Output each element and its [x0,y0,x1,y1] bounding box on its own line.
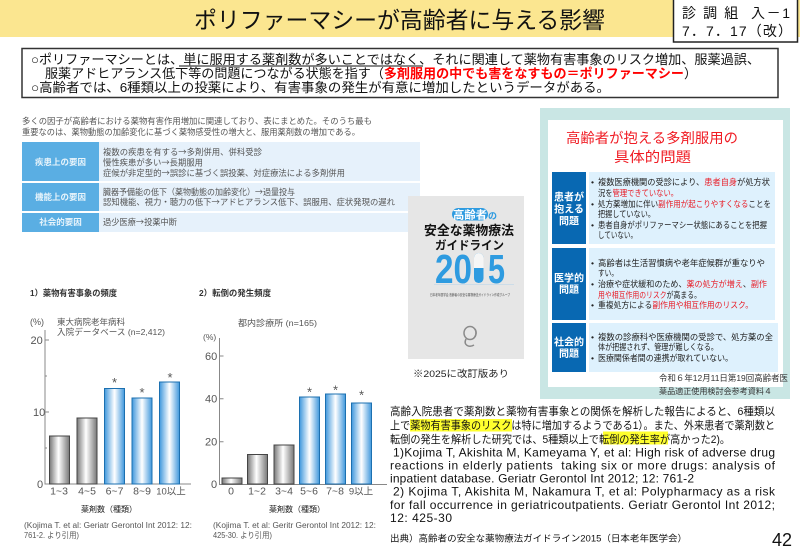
significance marks: * [307,384,312,400]
book cover: 日本老年医学会 高齢者の安全な薬物療法ガイドライン作成グループ [430,292,510,297]
x axis labels [228,486,374,514]
chart 2 heading: 2）転倒の発生頻度 [199,288,272,298]
notice box: document ID: 診 調 組 入－1 [682,5,790,21]
panel: specific problems [540,108,790,399]
row: disease factors: 疾患上の要因 [35,157,86,167]
book cover: の [488,211,497,221]
row: patient problems: 抱える [554,202,584,216]
row: disease factors: 慢性疾患が多い→長期服用 [103,156,203,168]
chart 1: adverse drug events [24,288,192,540]
x axis labels: 1~3 [50,486,68,498]
row: patient problems: • [591,177,594,187]
significance marks: * [167,370,173,385]
book cover: 高齢者 [453,208,487,222]
chart 2 citation: (Kojima T. et al: Geritr Gerontol Int 2012: 12: [213,521,376,530]
row: functional factors: 臓器予備能の低下（薬物動態の加齢変化）→過量投与 [103,186,295,198]
row: patient problems: 把握していない。 [598,208,655,219]
x axis labels: 4~5 [78,486,96,498]
book year with capsule: 5 [488,246,505,292]
references: 12: 425-30 [390,511,452,525]
page number: 42 [772,530,792,550]
chart 1 heading: 1）薬物有害事象の頻度 [30,288,118,298]
y axis labels [205,351,217,491]
factor table [22,142,420,232]
title band [0,0,800,37]
row: medical problems [552,248,775,320]
explanatory text with highlights: 転倒の発生を解析した研究では、5種類以上で転倒の発生率が高かった2)。 [390,432,730,446]
row: patient problems: 問題 [559,216,579,228]
title: ポリファーマシーが高齢者に与える影響 [194,7,605,33]
x axis labels: 6~7 [106,486,124,498]
chart 1: adverse drug events: 761-2. より引用) [24,531,79,540]
row: social problems: 問題 [559,348,579,360]
x axis labels: 1~2 [248,486,266,498]
row: medical problems: 医学的 [554,272,584,284]
row: medical problems: 治療や症状緩和のため、薬の処方が増え、副作 [598,278,767,289]
chart 2: falls: (%) [203,332,216,342]
row: medical problems: 高齢者は生活習慣病や老年症候群が重なりや [598,257,765,268]
notice box: document ID [674,0,798,42]
book title: 安全な薬物療法 [424,223,514,238]
x axis labels: 3~4 [275,486,293,498]
row: functional factors: 機能上の要因 [35,192,86,202]
bars [50,382,180,484]
significance marks: * [333,382,338,398]
row: medical problems: • [591,258,594,268]
bars [222,394,372,484]
x axis labels: 薬剤数（種類） [269,504,325,514]
y axis labels: 40 [205,394,217,406]
row: patient problems: 患者が [554,190,584,204]
significance marks [112,370,173,400]
references: inpatient database. Geriatr Gerontol Int 2012; 12: 761-2 [390,472,694,486]
row: functional factors [22,183,420,211]
y axis labels: 0 [211,479,217,491]
y axis labels: 20 [205,436,217,448]
book note: ※2025に改訂版あり [413,368,509,380]
explanatory text with highlights [390,404,775,446]
y axis labels: 60 [205,351,217,363]
significance marks: * [112,375,117,390]
row: social problems: 医療関係者間の連携が取れていない。 [598,352,733,363]
book cover: ガイドライン [435,238,504,252]
row: disease factors: 症候が非定型的→誤診に基づく誤投薬、対症療法による多剤併用 [103,167,345,179]
chart 1: adverse drug events: 東大病院老年病科 [57,317,125,327]
chart 2: falls [199,288,387,540]
panel source [659,373,788,396]
row: social factors: 過少医療→投薬中断 [103,216,177,228]
source line: 出典）高齢者の安全な薬物療法ガイドライン2015（日本老年医学会） [390,532,687,544]
references: 1)Kojima T, Akishita M, Kameyama Y, et al: High risk of adverse drug [393,446,775,460]
references [390,446,776,525]
x axis labels [50,486,186,514]
references: for fall occurrence in geriatricoutpatients. Geriatr Gerontol Int 2012; [390,498,775,512]
row: medical problems: 問題 [559,284,579,296]
row: patient problems: • [591,220,594,230]
y axis labels [30,335,45,491]
panel source: 薬品適正使用検討会参考資料４ [659,386,772,396]
row: medical problems: 用や相互作用のリスクが高まる。 [598,289,701,300]
y axis labels: 10 [33,407,45,419]
publisher logo [464,326,476,346]
chart 1: adverse drug events: (%) [30,317,44,327]
row: patient problems: 患者自身がポリファーマシー状態にあることを把握 [598,219,767,230]
row: medical problems: • [591,300,594,310]
references: reactions in elderly patients taking six or more drugs: analysis of [390,458,776,472]
row: disease factors: 複数の疾患を有する→多剤併用、併科受診 [103,146,262,158]
row: functional factors: 認知機能、視力・聴力の低下→アドヒアランス低下、誤服用、症状発現の遅れ [103,196,395,208]
row: social problems: 社会的 [554,336,584,348]
row: social problems: • [591,332,594,342]
panel heading: 高齢者が抱える多剤服用の [566,130,738,147]
row: patient problems: 複数医療機関の受診により、患者自身が処方状 [598,176,770,187]
row: social factors: 社会的要因 [39,217,82,227]
x axis labels: 7~8 [326,486,344,498]
intro text [22,116,372,137]
chart 1 citation: (Kojima T. et al: Geriatr Gerontol Int 2012: 12: [24,521,192,530]
row: social problems: 複数の診療科や医療機関の受診で、処方薬の全 [598,331,773,342]
book year with capsule: 20 [435,246,472,292]
book year with capsule [435,246,505,292]
explanatory text with highlights: 高齢入院患者で薬剤数と薬物有害事象との関係を解析した報告によると、6種類以 [390,404,775,418]
x axis labels: 0 [228,486,234,498]
row: medical problems: • [591,279,594,289]
summary line 1: ○ポリファーマシーとは、単に服用する薬剤数が多いことではなく、それに関連して薬物有害事象のリスク増加、服薬過誤、 [31,52,760,67]
summary line 3: ○高齢者では、6種類以上の投薬により、有害事象の発生が有意に増加したというデータがある。 [31,80,610,95]
row: disease factors [22,142,420,181]
intro text: 重要なのは、薬物動態の加齢変化に基づく薬物感受性の増大と、服用薬剤数の増加である。 [22,127,360,137]
references: 2) Kojima T, Akishita M, Nakamura T, et al: Polypharmacy as a risk [393,484,776,498]
row: social factors [22,213,420,232]
row: social problems: • [591,353,594,363]
significance marks: * [139,385,145,400]
significance marks [307,382,364,402]
row: social problems [552,323,778,372]
x axis labels: 薬剤数（種類） [81,504,137,514]
row: social problems: 体が把握されず、管理が難しくなる。 [598,341,718,352]
notice box: document ID: 7．7．17（改） [682,23,792,39]
explanatory text with highlights: 上で薬物有害事象のリスクは特に増加するようである1）。また、外来患者で薬剤数と [390,418,775,432]
x axis labels: 5~6 [300,486,318,498]
panel heading [566,130,738,166]
book title badge [452,208,488,220]
chart 1: adverse drug events: 入院データベース (n=2,412) [57,327,165,337]
intro text: 多くの因子が高齢者における薬物有害作用増加に関連しており、表にまとめた。そのうち最も [22,116,372,126]
x axis labels: 10以上 [156,486,186,498]
row: medical problems: すい。 [598,268,618,278]
row: patient problems: • [591,199,594,209]
row: medical problems: 重複処方による副作用や相互作用のリスク。 [598,299,753,310]
panel source: 令和６年12月11日第19回高齢者医 [659,373,788,383]
x axis labels: 8~9 [133,486,151,498]
row: patient problems: していない。 [598,230,637,240]
row: patient problems: 況を管理できていない。 [598,187,678,198]
chart 2: falls: 425-30. より引用) [213,531,272,540]
summary line 2: 服薬アドヒアランス低下等の問題につながる状態を指す（多剤服用の中でも害をなすもの＝ポリファーマシー） [45,66,697,81]
significance marks: * [359,388,364,402]
chart 2: falls: 都内診療所 (n=165) [238,318,317,328]
y axis labels: 20 [30,335,43,347]
row: patient problems [552,172,775,244]
x axis labels: 9以上 [349,486,374,498]
book cover [408,196,524,359]
summary box [22,48,778,98]
row: patient problems: 処方薬増加に伴い副作用が起こりやすくなることを [598,198,771,209]
panel heading: 具体的問題 [614,149,691,166]
y axis labels: 0 [37,479,43,491]
